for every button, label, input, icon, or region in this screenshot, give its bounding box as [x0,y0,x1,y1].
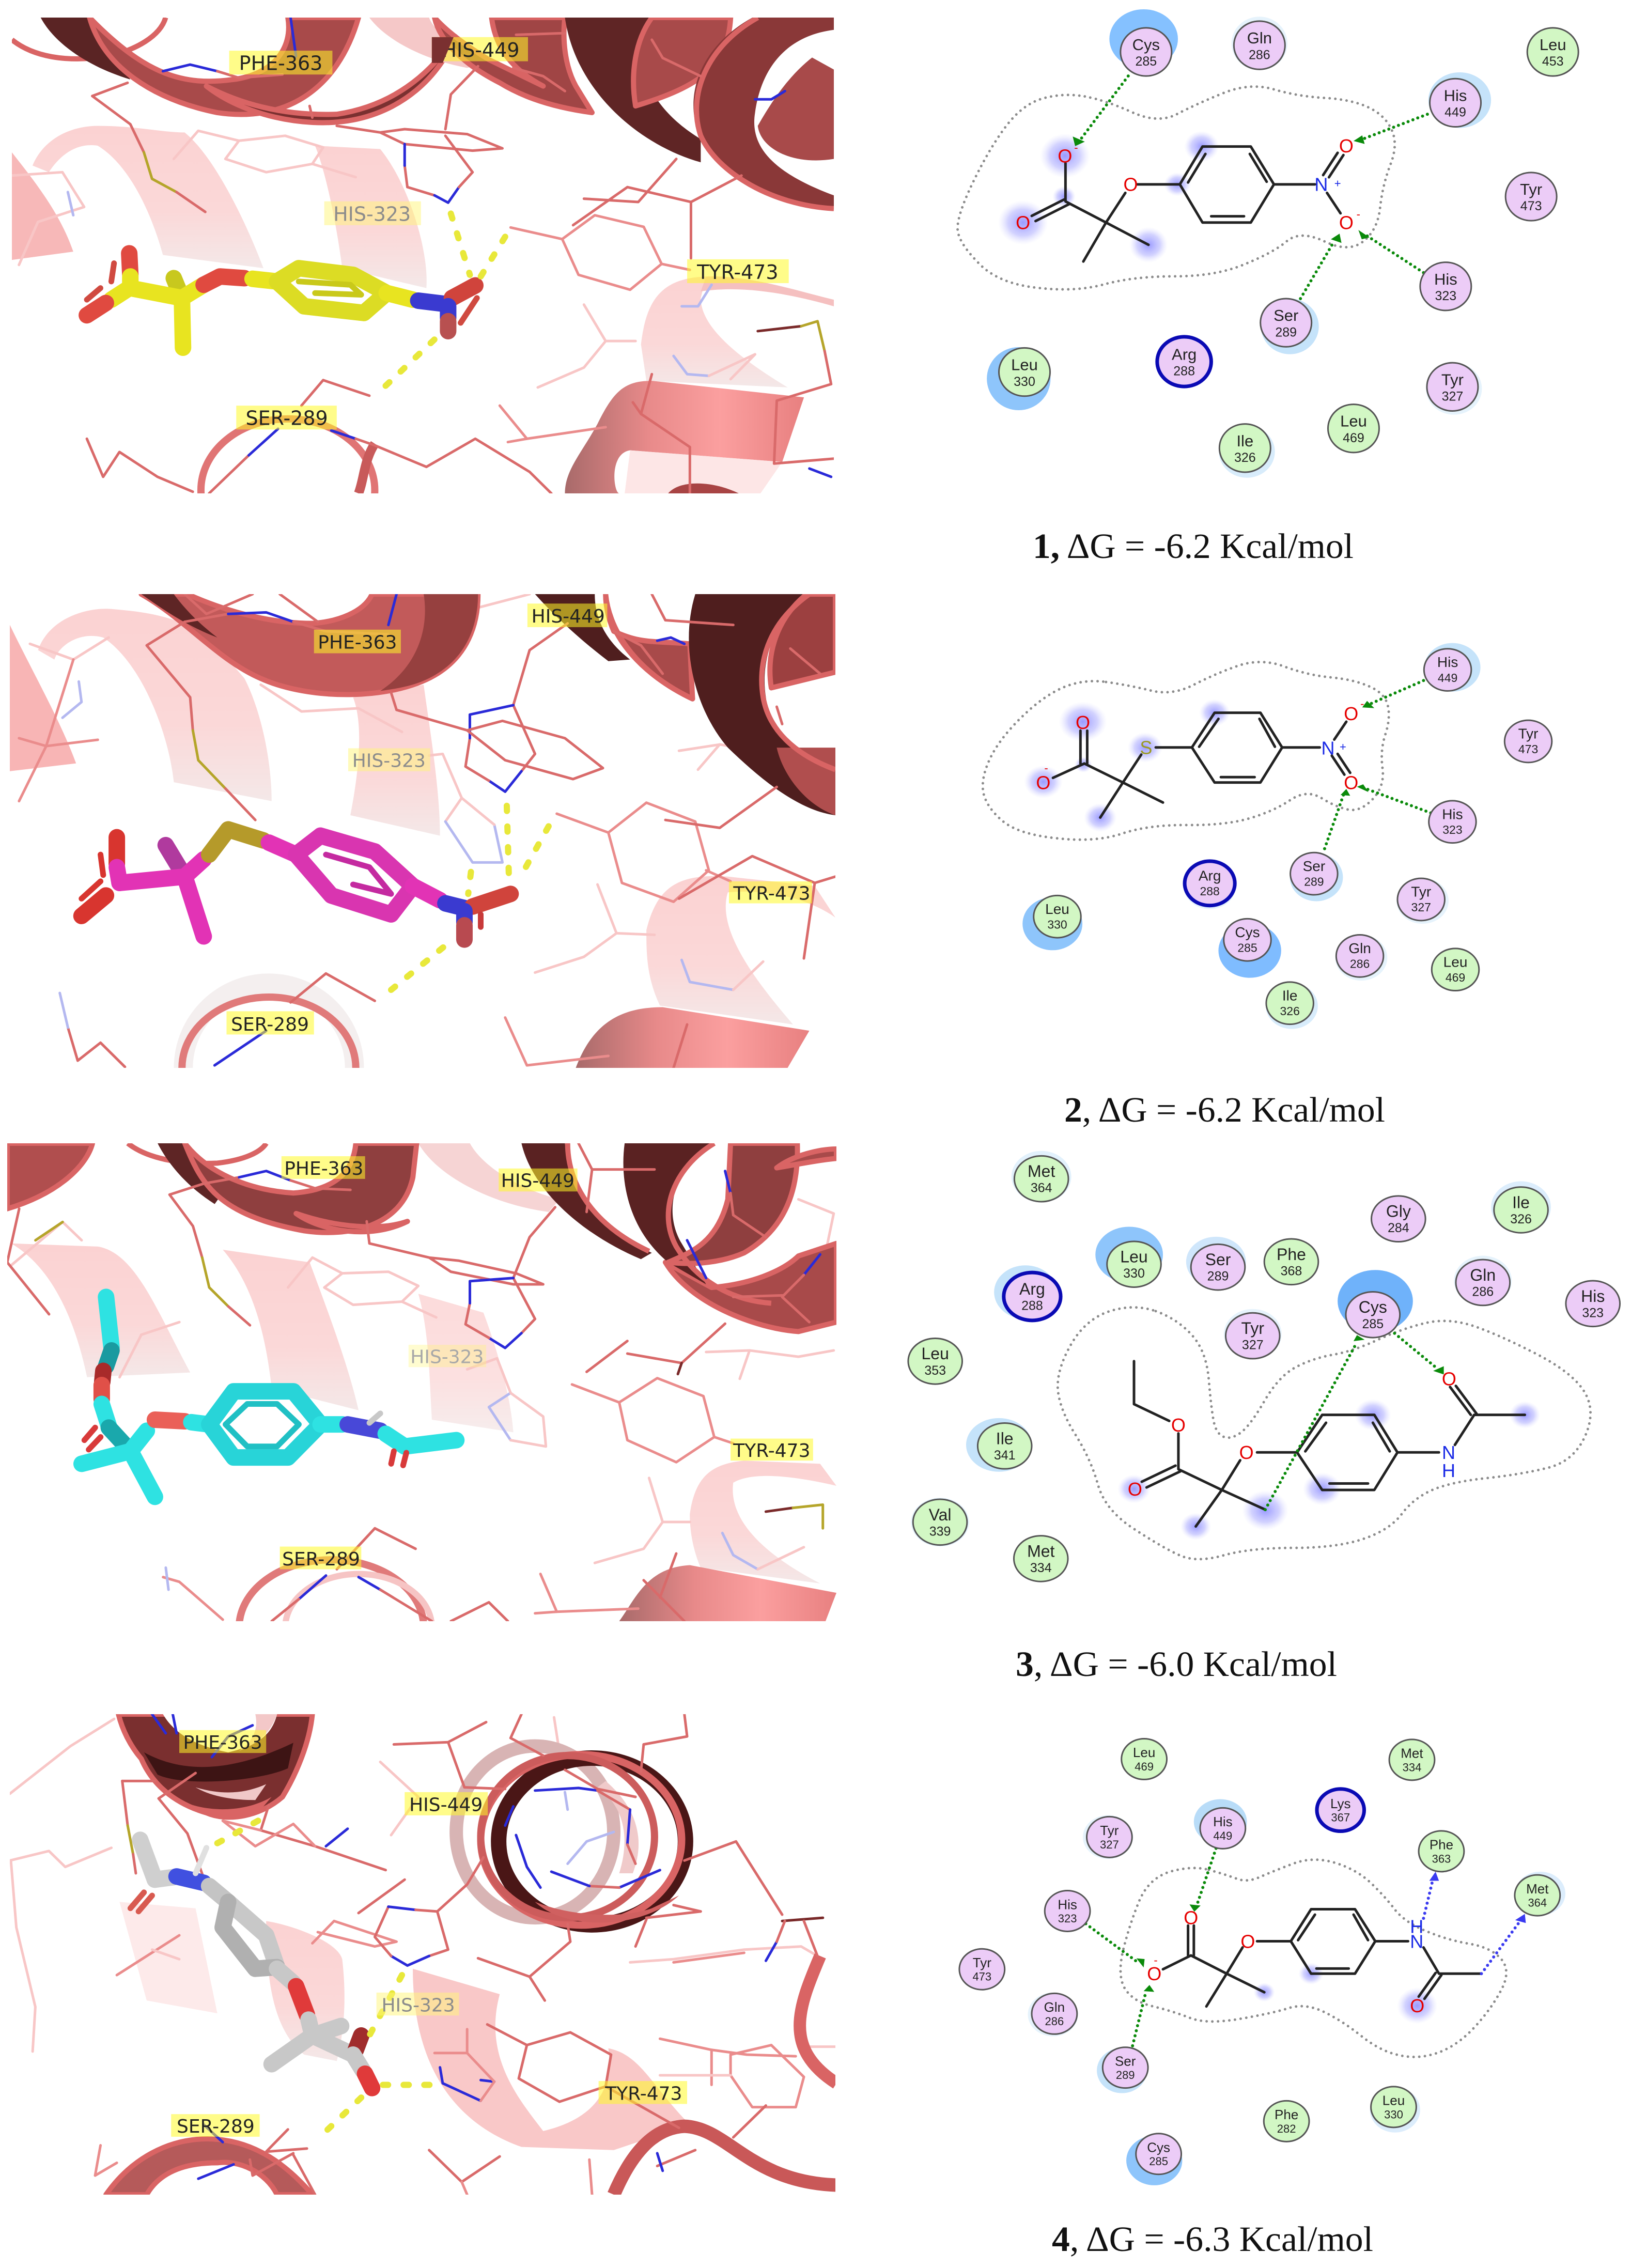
residue Lys 367: 367 [1331,1811,1350,1824]
lower ribbons [201,381,804,561]
residue Leu 330: Leu [1045,901,1069,917]
residue Ser 289: Ser [1115,2053,1136,2069]
residue Gln 286 [1454,1256,1512,1306]
atom labels: O [1339,135,1354,157]
residue Ile 326 [1266,982,1318,1029]
residue Met 334: 334 [1403,1761,1421,1774]
residue Phe 368: 368 [1281,1264,1302,1278]
residue Arg 288 [994,1265,1061,1321]
residue Gln 286 [1232,17,1287,70]
residue Tyr 473: 473 [1520,199,1542,213]
residue Ser 289 [1186,1237,1246,1290]
residue Cys 285: 285 [1362,1317,1384,1331]
ribbon helices [141,594,835,815]
residue Gln 286: 286 [1045,2015,1064,2028]
residue Leu 453 [1527,28,1578,76]
caption for compound 4: 4, ΔG = -6.3 Kcal/mol [1052,2219,1373,2259]
residue Phe 368: Phe [1277,1245,1306,1264]
residue Leu 330 [1095,1226,1163,1287]
residue Leu 330: Leu [1011,356,1038,374]
atom labels: N [1314,174,1328,195]
residue labels [171,1730,687,2137]
residue Tyr 327: 327 [1411,900,1431,914]
residue labels: TYR-473 [733,883,811,904]
residue Gln 286: 286 [1249,48,1270,62]
panel 4: 3D docking pose of compound 4 [10,1714,835,2195]
residue His 323 [1420,262,1471,310]
residue Tyr 327: 327 [1242,1338,1264,1353]
residue Val 339 [911,1498,969,1546]
residue labels: HIS-449 [442,39,520,61]
residue Gln 286: 286 [1350,957,1370,971]
atom labels: - [1360,697,1364,710]
residue Cys 285: Cys [1147,2140,1170,2155]
hydrogen bonds [385,213,505,386]
protein side chains wireframe [87,18,834,493]
residue Ile 326 [1219,424,1275,478]
atom labels: O [1240,1931,1255,1952]
atom labels: O [1036,772,1050,793]
molecule bonds [1032,147,1343,261]
hydrogen-bond arrows [1086,1848,1526,2046]
residue His 323: His [1058,1897,1077,1912]
atom labels: N [1410,1931,1423,1952]
residue labels: SER-289 [245,407,328,430]
residue Ser 289 [1290,852,1343,901]
ligand sticks: compound 3 (cyan) [82,1297,456,1497]
residue Cys 285 [1338,1270,1413,1338]
residue Leu 330: Leu [1120,1248,1148,1266]
residue Ser 289: 289 [1275,325,1297,339]
panel 2: 2D interaction diagram of compound 2 [982,643,1553,1029]
residue Lys 367: Lys [1330,1796,1351,1811]
residue Leu 469: Leu [1340,412,1367,430]
lower ribbons [106,1956,836,2195]
molecule bonds [1053,713,1350,817]
atom labels: S [1140,737,1152,758]
residue Ile 326: Ile [1512,1193,1530,1211]
residue Tyr 473: 473 [972,1970,991,1983]
protein side chains wireframe [60,594,835,1068]
residue His 323 [1566,1281,1620,1327]
residue Leu 469 [1432,949,1479,991]
residue His 323: 323 [1058,1912,1077,1925]
binding pocket contour [1058,1308,1591,1559]
residue His 449 [1428,72,1491,128]
residue Cys 285: 285 [1135,54,1157,69]
residue His 323: His [1581,1287,1605,1306]
residue Ile 326: 326 [1234,451,1256,465]
residue labels [226,603,812,1035]
residue His 323: 323 [1442,823,1463,836]
protein side chains wireframe [7,1143,823,1621]
atom labels: - [1154,1953,1158,1966]
atom solvent halos [1117,1399,1540,1540]
residue His 323: 323 [1582,1306,1604,1320]
residue Ser 289: 289 [1116,2069,1135,2081]
atom labels: O [1016,212,1030,234]
residue Phe 363: Phe [1430,1837,1453,1853]
residue Arg 288 [1157,337,1211,386]
atom labels [1147,1907,1424,2016]
residue Lys 367 [1317,1789,1364,1831]
hydrogen-bond arrows [1073,76,1427,299]
residue Cys 285: Cys [1235,924,1260,940]
residue Arg 288: 288 [1200,884,1220,898]
caption for compound 1: 1, ΔG = -6.2 Kcal/mol [1033,526,1354,566]
residue Leu 330: Leu [1383,2093,1405,2108]
residue Ile 341: Ile [996,1429,1014,1448]
residue Arg 288: Arg [1199,867,1221,883]
residue labels: PHE-363 [239,52,322,74]
atom labels: O [1147,1963,1161,1984]
residue Phe 282: Phe [1275,2107,1298,2122]
ligand sticks: compound 1 (yellow) [87,253,477,348]
atom solvent halos [1254,1963,1437,2024]
residue Phe 368 [1264,1239,1318,1285]
top-left helix seen end-on [118,1714,313,1817]
residue Leu 330: 330 [1384,2108,1403,2121]
faded background helices [12,126,834,387]
residue Ile 341 [966,1418,1032,1472]
residue Ser 289: Ser [1205,1250,1231,1269]
residue His 449: His [1444,86,1467,104]
residue Cys 285 [1109,9,1178,76]
residue His 323: His [1442,806,1463,822]
residue Gly 284: 284 [1388,1221,1409,1235]
residue Leu 469: Leu [1443,954,1467,970]
residue labels: HIS-449 [501,1170,574,1191]
residue Val 339: 339 [929,1524,951,1539]
residue Leu 453: 453 [1542,54,1564,69]
residue Leu 330 [1370,2087,1420,2133]
residue Ser 289: 289 [1304,875,1324,888]
residue labels: HIS-323 [410,1347,484,1368]
residue His 449: His [1437,654,1458,670]
residue Ile 326: 326 [1510,1212,1532,1226]
atom labels [1128,1369,1456,1500]
atom labels: O [1128,1479,1142,1500]
residue His 323: 323 [1435,289,1456,303]
residue Tyr 327: Tyr [1411,884,1431,900]
residue Ile 326 [1491,1182,1551,1233]
caption for compound 3: 3, ΔG = -6.0 Kcal/mol [1016,1644,1337,1684]
residue Tyr 327 [1224,1309,1282,1359]
residue Ser 289: Ser [1303,858,1325,874]
residue Phe 363: 363 [1432,1852,1451,1865]
atom labels: + [1334,177,1341,190]
residue Leu 469 [1122,1738,1167,1779]
residue Leu 353 [908,1338,962,1384]
residue Met 364 [1515,1872,1565,1916]
atom labels: N [1321,737,1334,758]
residue Cys 285: 285 [1237,941,1257,954]
panel 2: 3D docking pose of compound 2 [10,594,835,1068]
residue labels: SER-289 [177,2116,255,2137]
atom labels: H [1410,1916,1423,1937]
atom labels: O [1410,1995,1424,2016]
residue Leu 453: Leu [1540,36,1566,54]
residue Tyr 327: 327 [1442,389,1463,403]
atom solvent halos [1024,699,1230,832]
residue Tyr 327: 327 [1100,1838,1119,1851]
atom labels: H [1442,1460,1455,1481]
residue Gly 284 [1372,1196,1425,1242]
panel 3: 3D docking pose of compound 3 [7,1143,836,1621]
panel 1: 3D docking pose of compound 1 [12,18,834,493]
residue Cys 285 [1126,2134,1182,2185]
residue Ile 326: 326 [1280,1004,1300,1018]
residue Gln 286 [1028,1993,1078,2037]
residue Leu 469 [1328,405,1379,453]
residue labels [280,1156,813,1570]
atom labels: O [1239,1442,1254,1463]
atom labels: - [1357,208,1360,221]
residue Met 364 [1012,1151,1071,1202]
residue Arg 288: Arg [1019,1280,1045,1298]
hydrogen-bond arrows [1265,1333,1444,1510]
residue Ser 289 [1097,2047,1148,2093]
atom labels: O [1123,174,1138,195]
residue Tyr 473 [1505,173,1557,221]
residue labels: HIS-449 [532,606,605,627]
residue Leu 353: Leu [922,1344,949,1363]
residue labels: HIS-323 [382,1995,455,2016]
binding pocket contour [983,662,1389,840]
residue Gln 286 [1335,935,1387,981]
binding pocket contour [958,87,1395,289]
residue Cys 285: Cys [1359,1298,1387,1316]
residue Phe 282 [1264,2101,1309,2141]
residue Tyr 473: Tyr [973,1955,991,1970]
atom labels [1016,135,1360,234]
central helix seen end-on [456,1746,686,1925]
residue Leu 330: 330 [1123,1266,1145,1281]
atom labels: - [1044,762,1048,774]
residue labels [229,37,789,430]
residue Tyr 327: Tyr [1100,1823,1119,1838]
residue Phe 282: 282 [1277,2122,1296,2135]
residue labels: TYR-473 [733,1440,810,1462]
atom labels: - [1074,141,1078,154]
residue labels: TYR-473 [604,2084,682,2105]
atom labels: + [1340,740,1346,753]
residue Tyr 327: Tyr [1241,1319,1264,1338]
residue labels: SER-289 [282,1549,360,1570]
atom solvent halos [998,131,1219,262]
residue Leu 469: 469 [1135,1760,1154,1773]
residue labels: HIS-449 [409,1794,483,1815]
atom labels: N [1442,1442,1455,1463]
residue Met 364: Met [1526,1881,1549,1897]
residue Ser 289: 289 [1207,1269,1229,1284]
panel 3: 2D interaction diagram of compound 3 [907,1151,1621,1582]
residue Arg 288: 288 [1021,1298,1043,1313]
residue Tyr 473: Tyr [1520,180,1542,198]
residue His 449: 449 [1213,1829,1232,1842]
residue Gln 286: Gln [1348,940,1371,956]
residue His 323 [1045,1890,1090,1931]
residue Leu 353: 353 [924,1363,946,1378]
residue Cys 285: 285 [1149,2155,1168,2168]
atom labels: O [1058,145,1072,166]
residue Leu 469: 469 [1343,431,1364,445]
residue labels: PHE-363 [284,1158,363,1179]
residue Ile 326: Ile [1236,432,1253,450]
residue Ile 341: 341 [994,1448,1016,1463]
residue Tyr 473: Tyr [1518,726,1539,742]
ribbon helices [7,1143,836,1331]
residue Met 334 [1389,1739,1435,1780]
residue His 449: 449 [1438,671,1457,685]
residue Tyr 473: 473 [1518,742,1538,756]
residue Leu 330 [1022,895,1082,950]
residue Tyr 327 [1426,363,1482,415]
residue labels: SER-289 [231,1014,309,1035]
ligand sticks: compound 4 (grey) [130,1840,372,2088]
residue Leu 330 [987,347,1050,410]
residue Tyr 327 [1396,878,1449,924]
molecule bonds [1163,1909,1481,2007]
residue Arg 288 [1184,861,1236,909]
residue Arg 288: 288 [1173,364,1195,379]
residue Gly 284: Gly [1386,1202,1411,1221]
hydrogen bonds [212,1821,443,2139]
residue Gln 286: Gln [1470,1266,1496,1284]
residue labels: PHE-363 [318,632,397,654]
residue Leu 330: 330 [1014,375,1035,389]
residue His 449: 449 [1444,105,1466,120]
atom labels: O [1339,212,1354,234]
atom labels: O [1076,712,1090,733]
residue Tyr 327: Tyr [1441,370,1464,389]
residue labels: HIS-323 [352,751,426,772]
residue Leu 330: 330 [1047,918,1067,931]
residue Ser 289: Ser [1273,306,1298,324]
residue His 449 [1194,1799,1247,1848]
residue His 323 [1429,801,1476,843]
residue Gln 286: Gln [1044,1999,1065,2015]
residue Val 339: Val [929,1505,951,1524]
residue Gln 286: Gln [1247,29,1272,47]
residue Cys 285: Cys [1132,36,1160,54]
panel 1: 2D interaction diagram of compound 1 [956,9,1579,478]
caption for compound 2: 2, ΔG = -6.2 Kcal/mol [1064,1090,1385,1129]
residue Met 364: 364 [1528,1897,1547,1909]
residue labels: HIS-323 [333,203,411,226]
ligand sticks: compound 2 (magenta) [82,829,510,940]
molecule bonds [1134,1361,1525,1527]
binding pocket contour [1121,1860,1506,2057]
residue Ile 326: Ile [1282,987,1297,1003]
residue Phe 363 [1419,1831,1464,1872]
residue Met 334: Met [1401,1746,1423,1761]
residue Arg 288: Arg [1172,346,1197,363]
hydrogen-bond arrows [1325,680,1431,849]
protein side chains wireframe [95,1714,823,2195]
residue Tyr 473 [959,1949,1005,1990]
atom labels: O [1184,1907,1198,1929]
residue Met 364: Met [1028,1162,1055,1180]
residue His 449: His [1213,1814,1233,1829]
atom labels: O [1344,772,1358,793]
residue labels: TYR-473 [696,261,779,284]
atom labels: O [1171,1415,1186,1436]
residue Leu 469: 469 [1446,971,1465,984]
residue Ser 289 [1261,299,1319,354]
residue Tyr 327 [1083,1815,1133,1859]
hydrogen bonds [391,806,549,990]
faded background helices [10,594,835,1162]
atom labels [1036,697,1364,793]
residue Leu 469: Leu [1133,1745,1155,1760]
atom labels: O [1344,703,1358,724]
residue labels: PHE-363 [183,1732,262,1753]
residue His 323: His [1434,270,1457,288]
residue Met 334: Met [1027,1542,1055,1560]
residue His 449 [1424,643,1481,692]
atom labels: O [1442,1369,1456,1390]
residue Tyr 473 [1504,720,1552,763]
residue Met 334: 334 [1030,1561,1052,1575]
residue Cys 285 [1218,919,1281,978]
faded background helices [11,1143,836,1695]
panel 4: 2D interaction diagram of compound 4 [958,1738,1565,2185]
ribbon helices [12,18,834,209]
residue Gln 286: 286 [1472,1284,1494,1299]
residue Met 334 [1014,1536,1068,1581]
residue Met 364: 364 [1031,1181,1052,1195]
faded background helices [10,1717,836,2150]
